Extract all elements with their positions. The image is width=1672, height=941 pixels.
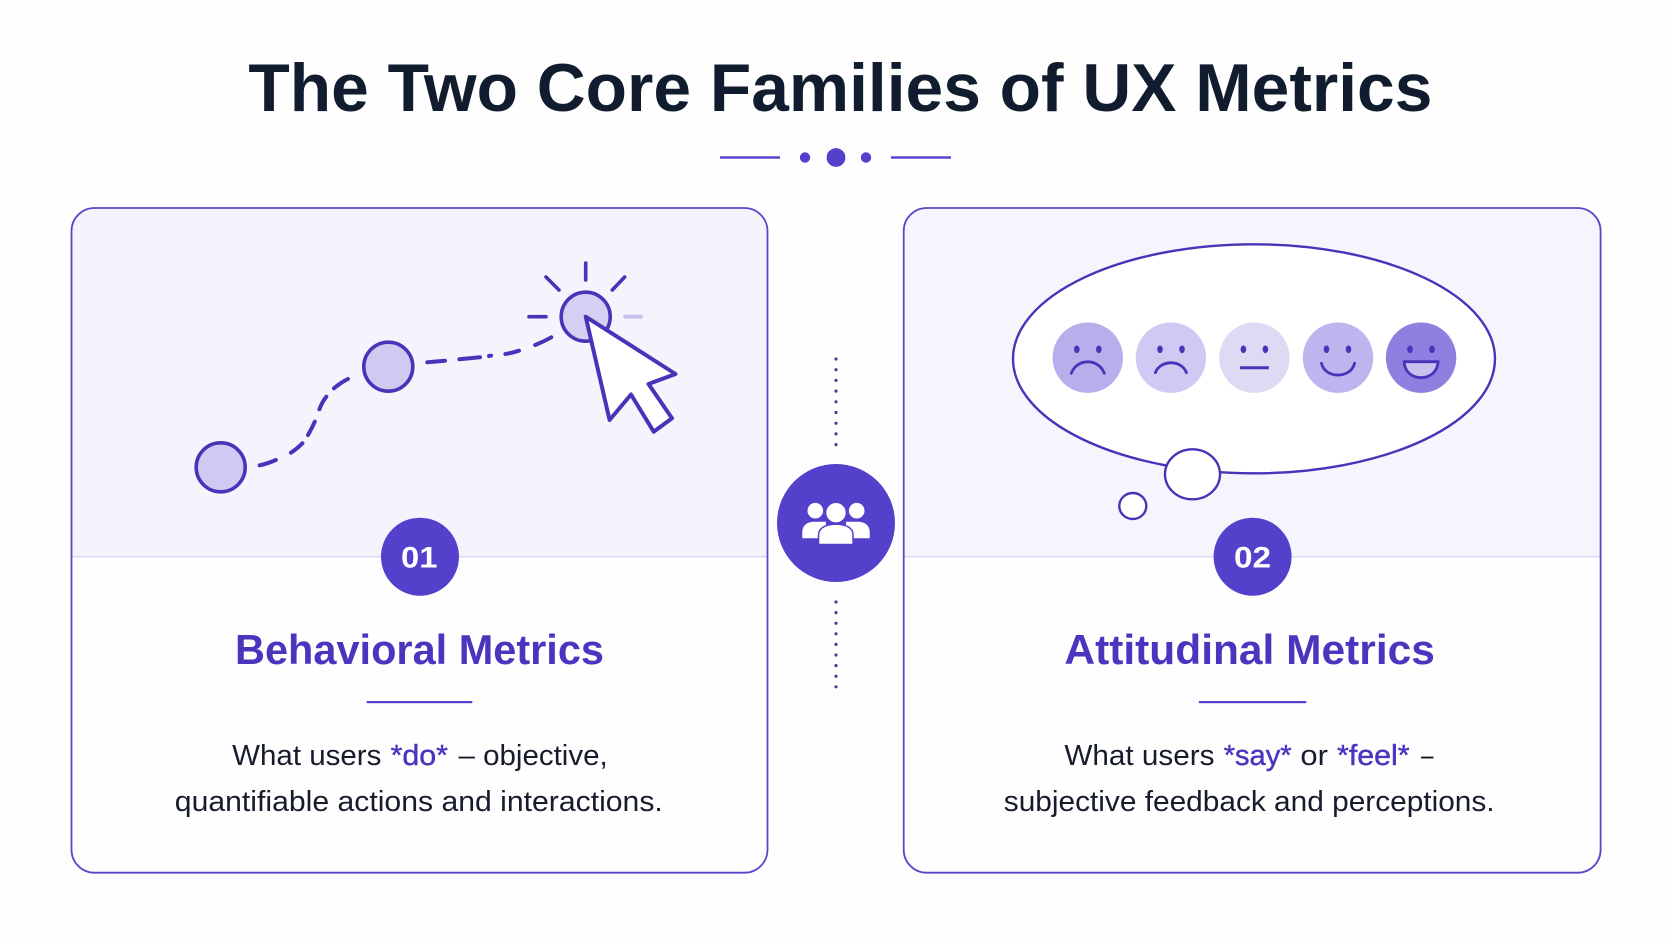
description: behavioral: quantifiable actions and interactions. xyxy=(175,786,663,818)
center circle xyxy=(777,464,895,582)
panel border xyxy=(904,208,1601,873)
rating face: neutral xyxy=(1219,322,1290,393)
description: attitudinal: *feel* xyxy=(1337,740,1410,772)
panel divider xyxy=(72,556,768,558)
heading: behavioral metrics: Behavioral Metrics xyxy=(235,626,604,673)
click point with rays xyxy=(529,263,641,341)
panel: behavioral metrics xyxy=(72,208,768,873)
icon: group of people xyxy=(802,503,870,544)
title ornament xyxy=(720,148,951,167)
heading underline xyxy=(1199,701,1306,703)
number badge 01 xyxy=(381,518,459,596)
description: behavioral: – objective, xyxy=(458,740,608,772)
panel divider xyxy=(904,556,1601,558)
panel illustration background xyxy=(72,208,768,557)
description: attitudinal: – xyxy=(1421,740,1434,772)
heading: attitudinal metrics: Attitudinal Metrics xyxy=(1064,626,1435,673)
rating face: happy xyxy=(1303,322,1373,393)
user journey dashed path xyxy=(260,337,551,465)
number badge 02: 02 xyxy=(1234,542,1271,575)
rating face: very unhappy xyxy=(1053,322,1123,393)
description: behavioral xyxy=(175,740,663,818)
upper dotted line xyxy=(834,359,838,446)
description: behavioral: *do* xyxy=(391,740,448,772)
rating face: very happy xyxy=(1386,322,1456,393)
description: behavioral: What users xyxy=(232,740,381,772)
panel: attitudinal metrics xyxy=(904,208,1601,873)
icon: cursor arrow xyxy=(586,317,676,432)
thought bubble xyxy=(1013,244,1495,519)
number badge 01: 01 xyxy=(401,542,437,575)
description: attitudinal: What users xyxy=(1064,740,1214,772)
title: The Two Core Families of UX Metrics xyxy=(248,50,1432,126)
heading underline xyxy=(367,701,472,703)
description: attitudinal: subjective feedback and perceptions. xyxy=(1004,786,1495,818)
lower dotted line xyxy=(834,602,838,688)
panel illustration background xyxy=(904,208,1601,557)
center connector xyxy=(777,359,895,688)
journey point 1 xyxy=(196,443,245,492)
description: attitudinal: or xyxy=(1300,740,1328,772)
panel border xyxy=(72,208,768,873)
rating face: unhappy xyxy=(1136,322,1206,393)
journey point 2 xyxy=(364,342,413,391)
description: attitudinal xyxy=(1004,740,1495,818)
description: attitudinal: *say* xyxy=(1224,740,1292,772)
number badge 02 xyxy=(1214,518,1292,596)
